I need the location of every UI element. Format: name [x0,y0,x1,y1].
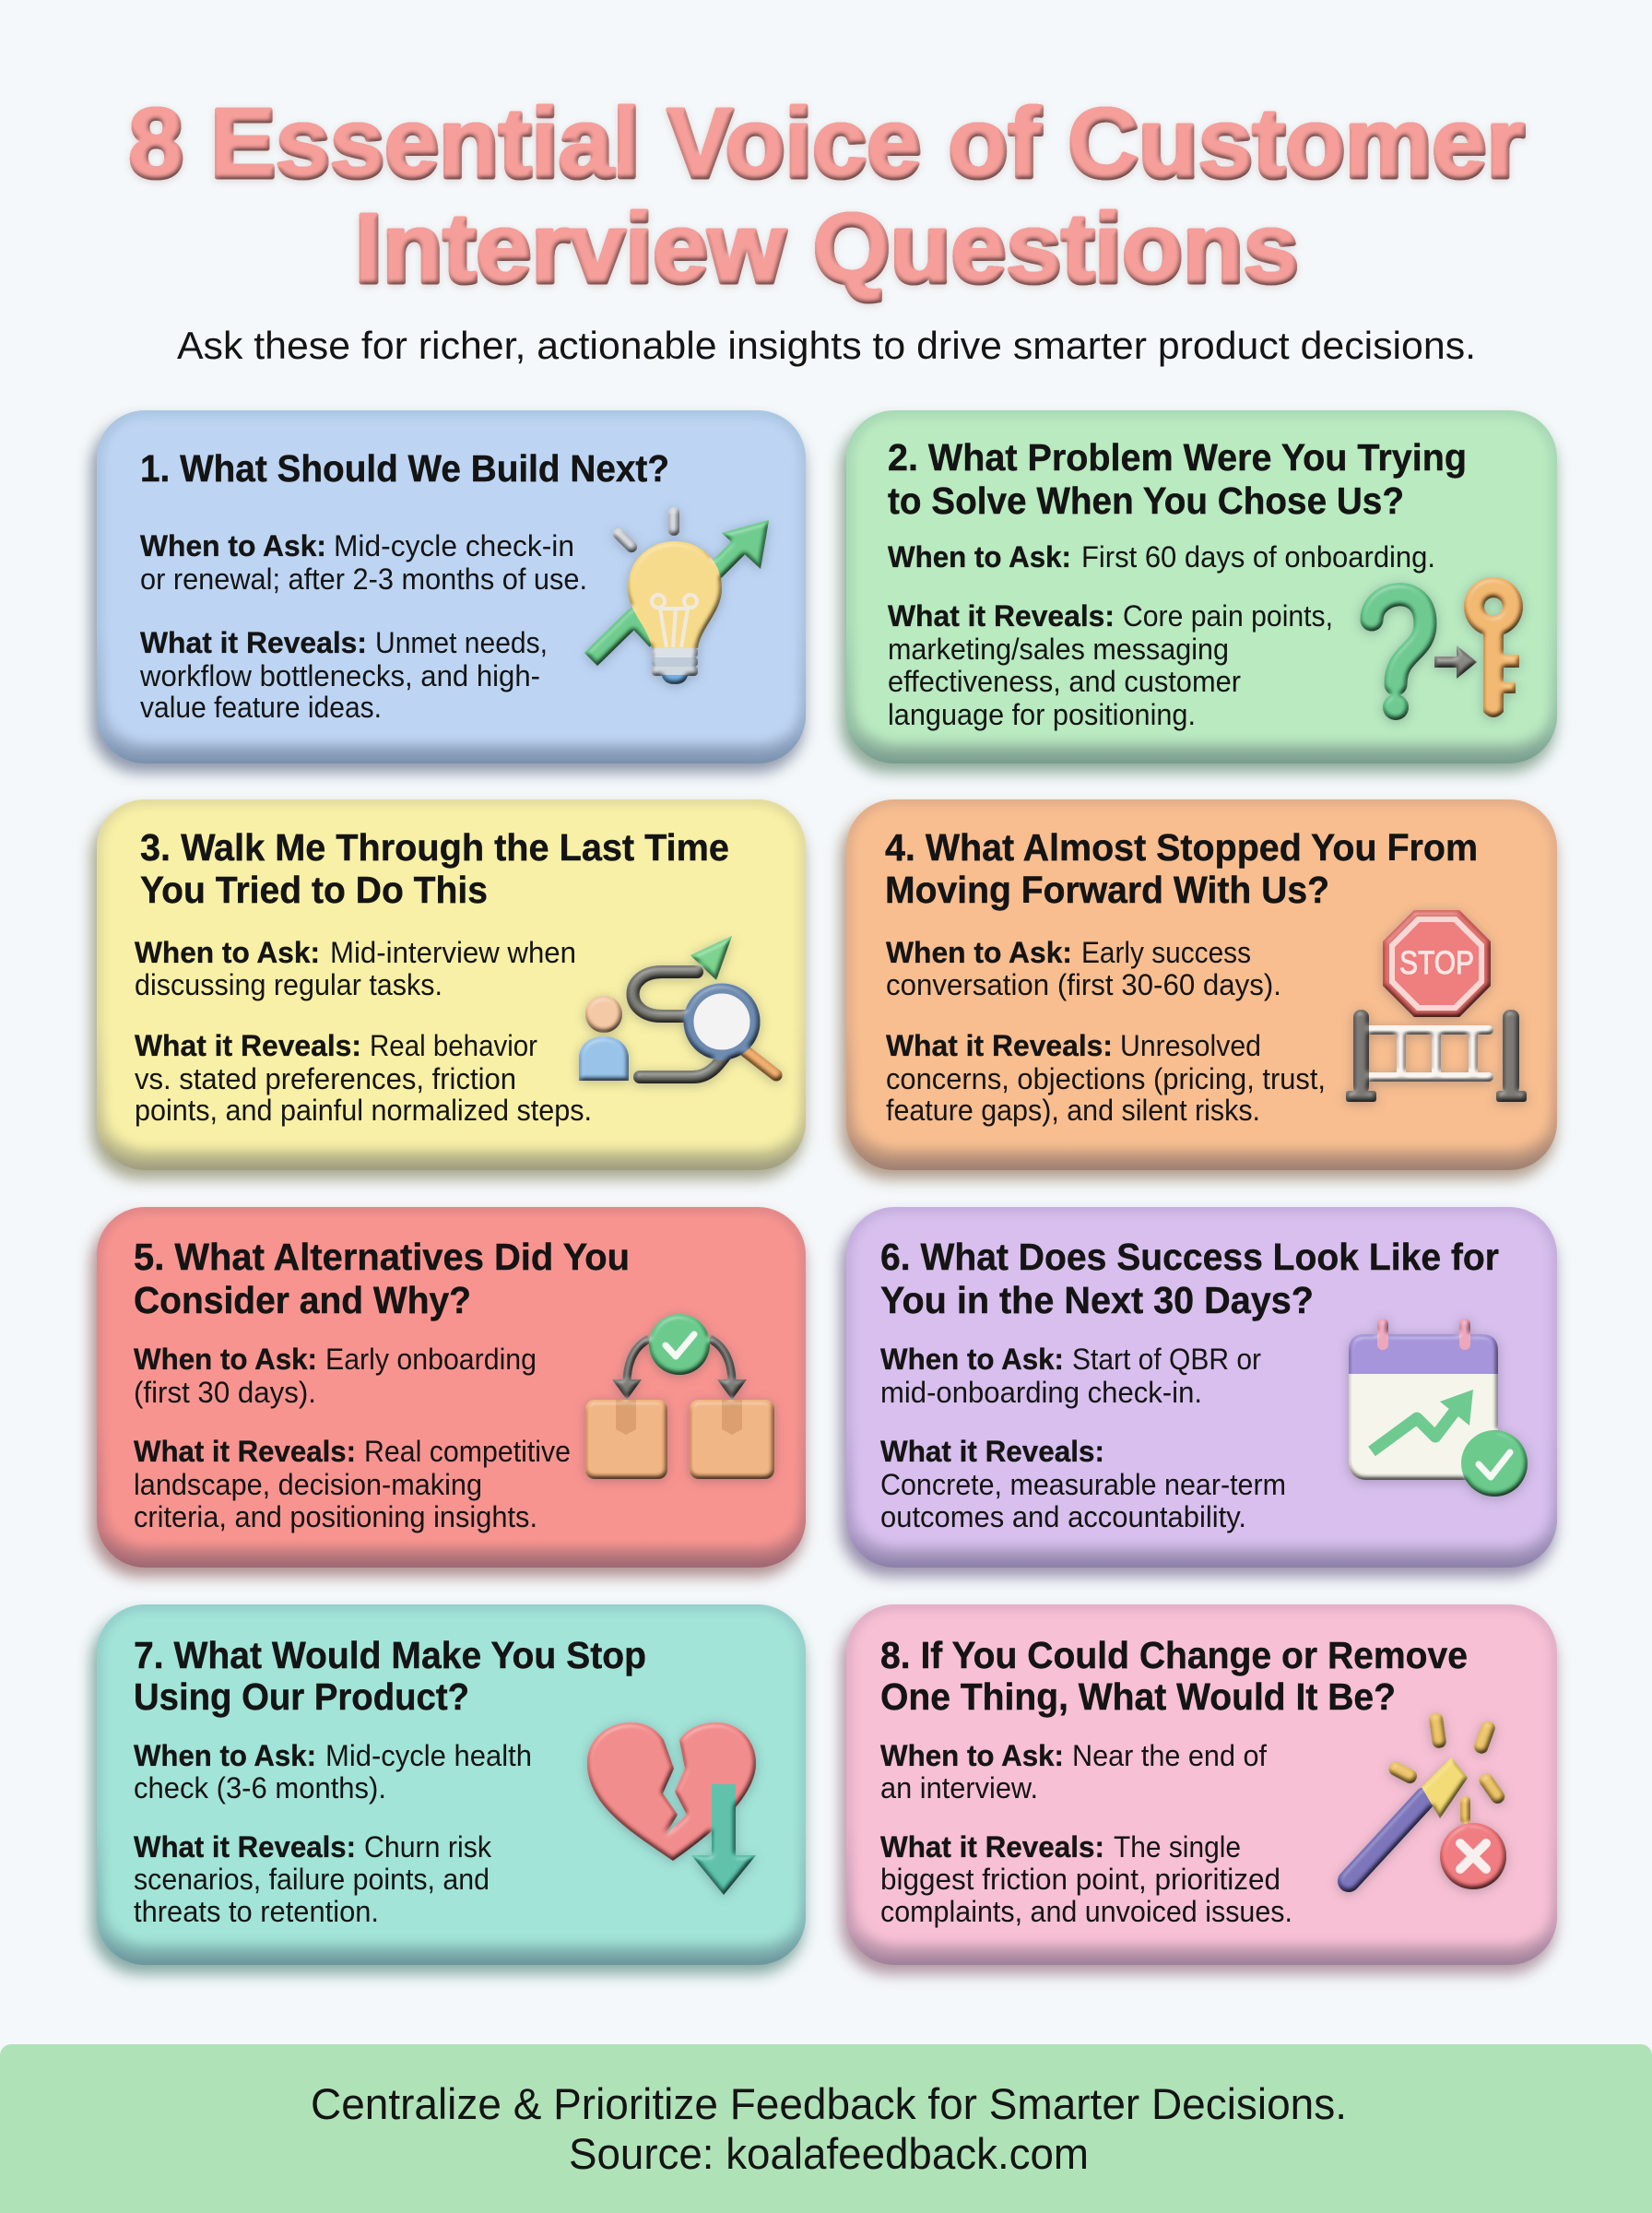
stop sign [1383,910,1491,1017]
what it reveals: Churn risk [364,1830,492,1864]
when to ask [886,936,1281,1001]
icon: stop sign and barrier [1346,910,1527,1102]
when to ask: When to Ask: [888,540,1071,574]
heading: 1. What Should We Build Next? [140,447,669,490]
heading [134,1236,630,1321]
panel: question 5 [91,1207,806,1577]
what it reveals: vs. stated preferences, friction [135,1062,516,1095]
when to ask: When to Ask: [880,1739,1064,1772]
when to ask: Early success [1081,936,1251,969]
heading [888,436,1467,522]
what it reveals [888,599,1333,731]
heading: You Tried to Do This [140,869,488,911]
when to ask: Early onboarding [325,1343,537,1376]
what it reveals: What it Reveals: [886,1029,1113,1062]
when to ask: Near the end of [1072,1739,1268,1772]
panel: question 4 [841,799,1557,1179]
heading: 6. What Does Success Look Like for [880,1236,1499,1278]
when to ask: When to Ask: [135,936,320,969]
when to ask: Start of QBR or [1072,1343,1261,1376]
heading: One Thing, What Would It Be? [880,1675,1396,1718]
what it reveals: language for positioning. [888,698,1196,731]
when to ask [140,529,587,596]
when to ask: Mid-cycle health [325,1739,532,1772]
when to ask: When to Ask: [134,1343,317,1376]
what it reveals: marketing/sales messaging [888,633,1229,666]
what it reveals: Real competitive [364,1435,571,1468]
card body green [841,410,1557,773]
when to ask: (first 30 days). [134,1376,316,1409]
card body yellow [91,799,806,1179]
panel: question 3 [91,799,806,1179]
when to ask: When to Ask: [880,1343,1064,1376]
what it reveals: What it Reveals: [140,626,367,659]
card body orange [841,799,1557,1179]
what it reveals [880,1435,1286,1533]
what it reveals: What it Reveals: [134,1435,356,1468]
heading: 5. What Alternatives Did You [134,1236,630,1278]
icon: question mark, arrow and key [1372,577,1523,720]
card body teal [91,1604,806,1974]
heading: 4. What Almost Stopped You From [885,826,1478,869]
what it reveals: landscape, decision-making [134,1468,482,1501]
what it reveals: outcomes and accountability. [880,1500,1246,1533]
card body purple [841,1207,1557,1577]
title: 8 Essential Voice of Customer [129,89,1525,198]
what it reveals [134,1435,571,1533]
when to ask: mid-onboarding check-in. [880,1376,1202,1409]
heading: 3. Walk Me Through the Last Time [140,826,729,869]
when to ask [888,540,1435,574]
what it reveals: What it Reveals: [888,599,1115,633]
card body red [91,1207,806,1577]
footer source: Source: koalafeedback.com [569,2129,1089,2178]
what it reveals: concerns, objections (pricing, trust, [886,1062,1326,1095]
barrier [1346,1010,1527,1102]
what it reveals [135,1029,592,1127]
when to ask: When to Ask: [134,1739,316,1772]
icon: magic wand with error badge [1349,1712,1507,1889]
panel: question 1 [91,410,806,773]
when to ask: an interview. [880,1771,1038,1805]
panel: question 8 [841,1604,1557,1974]
what it reveals: effectiveness, and customer [888,665,1241,698]
what it reveals [134,1830,492,1928]
what it reveals: The single [1114,1830,1241,1864]
when to ask: First 60 days of onboarding. [1081,540,1435,574]
when to ask [134,1739,532,1805]
when to ask [880,1343,1261,1409]
heading: Consider and Why? [134,1279,471,1321]
when to ask: Mid-interview when [330,936,576,969]
what it reveals: points, and painful normalized steps. [135,1094,592,1127]
heading: Moving Forward With Us? [885,869,1329,911]
card body pink [841,1604,1557,1974]
heading: 8. If You Could Change or Remove [880,1634,1468,1676]
panel: question 6 [841,1207,1557,1577]
title: Interview Questions [355,195,1299,303]
footer tagline: Centralize & Prioritize Feedback for Smarter Decisions. [311,2079,1347,2128]
heading: to Solve When You Chose Us? [888,479,1404,522]
what it reveals: Concrete, measurable near-term [880,1468,1286,1501]
what it reveals: What it Reveals: [880,1435,1104,1468]
what it reveals: feature gaps), and silent risks. [886,1094,1260,1127]
heading [885,826,1478,911]
when to ask: check (3-6 months). [134,1771,386,1805]
heading [880,1634,1468,1718]
what it reveals: biggest friction point, prioritized [880,1863,1280,1896]
heading [134,1634,646,1718]
what it reveals: What it Reveals: [135,1029,361,1062]
heading [880,1236,1499,1321]
what it reveals: Core pain points, [1123,599,1333,633]
card body blue [91,410,806,773]
title [129,89,1525,303]
what it reveals: workflow bottlenecks, and high- [139,659,540,692]
heading: 7. What Would Make You Stop [134,1634,646,1676]
panel: question 2 [841,410,1557,773]
panel: question 7 [91,1604,806,1974]
what it reveals [886,1029,1326,1127]
what it reveals: Real behavior [370,1029,537,1062]
what it reveals: complaints, and unvoiced issues. [880,1895,1292,1928]
what it reveals: scenarios, failure points, and [134,1863,490,1896]
icon: light bulb with rising arrow [591,507,769,684]
when to ask: When to Ask: [140,529,326,562]
footer banner [0,2044,1652,2213]
what it reveals: threats to retention. [134,1895,379,1928]
what it reveals [139,626,548,724]
what it reveals: What it Reveals: [880,1830,1104,1864]
icon: calendar with growth and check [1349,1319,1528,1497]
stop label: STOP [1399,945,1474,981]
what it reveals: What it Reveals: [134,1830,356,1864]
when to ask: discussing regular tasks. [135,968,442,1001]
icon: person, path and magnifier [579,936,776,1081]
heading [140,826,729,911]
subtitle: Ask these for richer, actionable insights to drive smarter product decisions. [177,324,1476,367]
icon: two boxes with check choice [585,1314,774,1479]
what it reveals: Unresolved [1120,1029,1261,1062]
when to ask: or renewal; after 2-3 months of use. [140,562,587,596]
heading: 2. What Problem Were You Trying [888,436,1467,479]
when to ask: conversation (first 30-60 days). [886,968,1281,1001]
heading: Using Our Product? [134,1675,469,1718]
what it reveals: criteria, and positioning insights. [134,1500,537,1533]
when to ask [134,1343,537,1409]
when to ask [135,936,576,1001]
when to ask: Mid-cycle check-in [334,529,574,562]
what it reveals: value feature ideas. [140,691,382,724]
what it reveals [880,1830,1292,1928]
heading: You in the Next 30 Days? [880,1279,1314,1321]
when to ask [880,1739,1268,1805]
when to ask: When to Ask: [886,936,1072,969]
what it reveals: Unmet needs, [375,626,548,659]
icon: broken heart with down arrow [587,1722,756,1895]
